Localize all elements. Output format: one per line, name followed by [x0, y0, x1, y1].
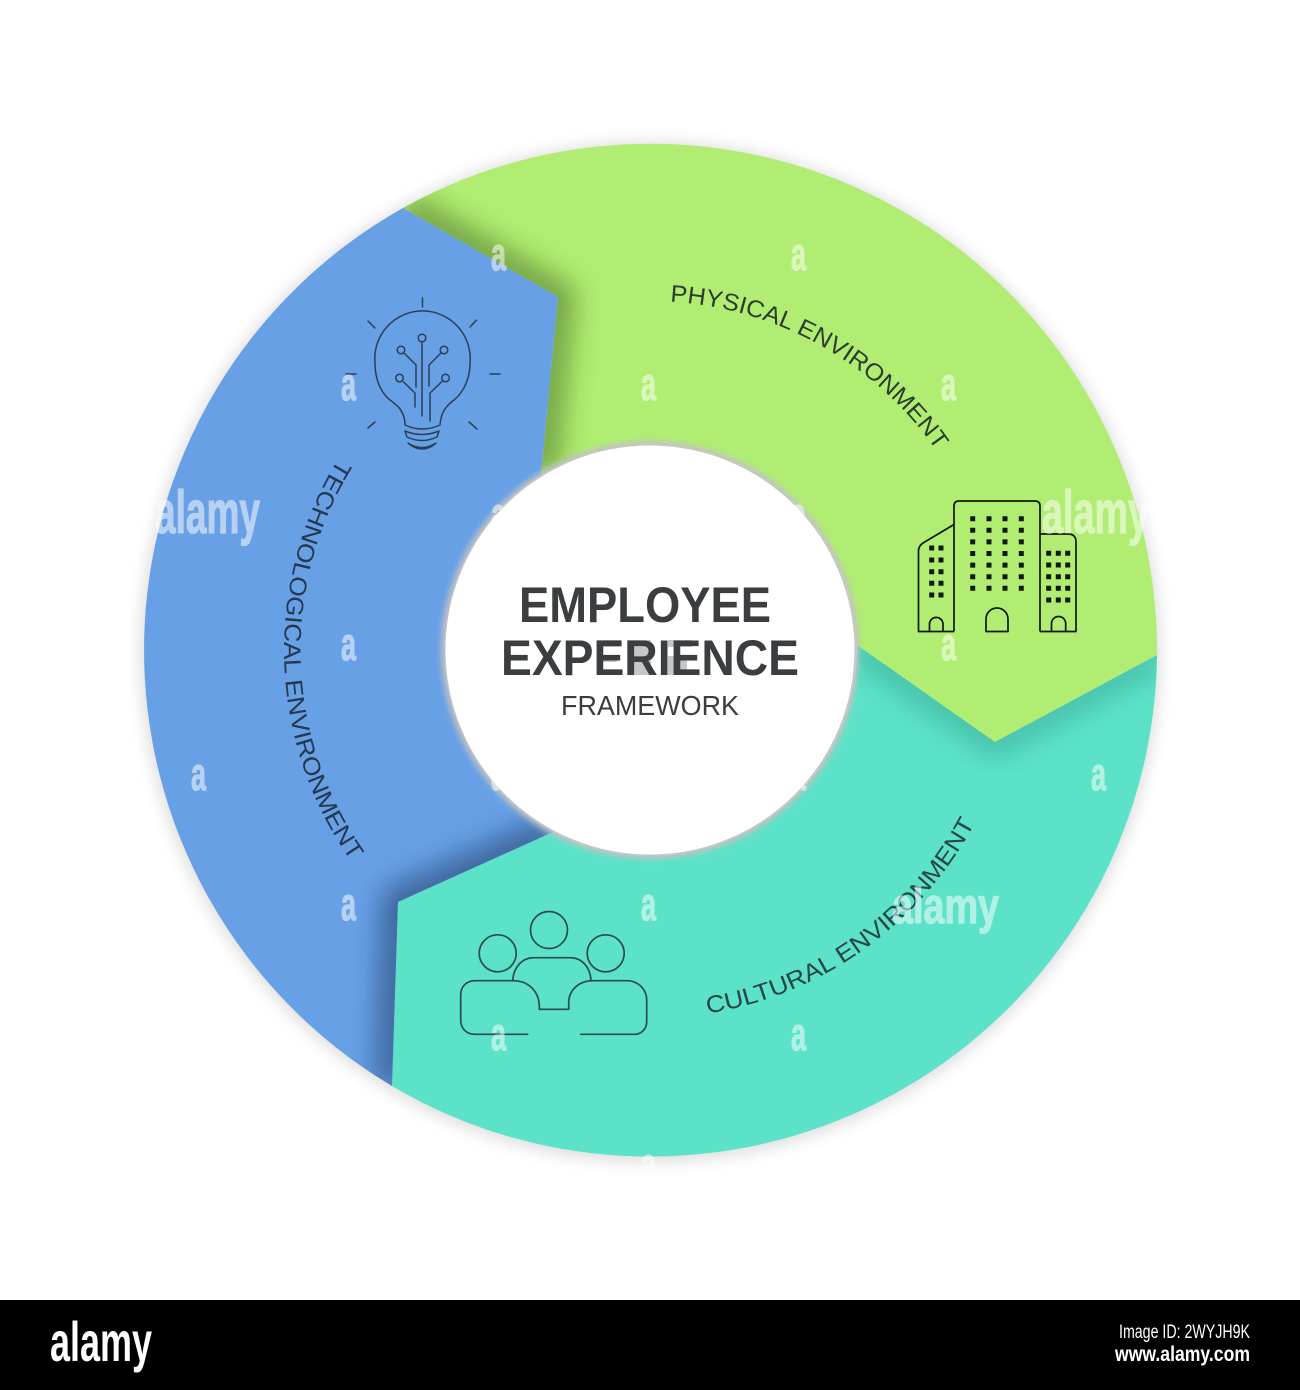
footer text: website: www.alamy.com [1114, 1343, 1250, 1366]
watermark: repeating letters: a [791, 1008, 806, 1060]
icon: light bulb [346, 298, 500, 449]
title line: employee: EMPLOYEE [519, 577, 771, 633]
footer logo: alamy: alamy [50, 1310, 152, 1373]
icon: office buildings [918, 501, 1076, 632]
watermark: repeating letters: a [791, 748, 806, 800]
watermark: repeating letters: a [491, 488, 506, 540]
watermark: repeating letters: a [641, 1138, 656, 1190]
watermark: repeating letters: a [941, 358, 956, 410]
outer ring shadow [140, 142, 1160, 1162]
watermark: large alamy right: alamy [1042, 479, 1149, 546]
watermark: repeating letters: a [491, 748, 506, 800]
watermark: repeating letters: a [191, 748, 206, 800]
center circle shadow [441, 441, 859, 859]
label: physical environment: PHYSICAL ENVIRONMENT [672, 285, 950, 446]
watermarks [155, 228, 1149, 1190]
watermark: repeating letters: a [341, 878, 356, 930]
label: technological environment: TECHNOLOGICAL ENVIRONMENT [284, 464, 364, 856]
title [501, 577, 799, 721]
watermark: repeating letters: a [791, 488, 806, 540]
title line: experience: EXPERIENCE [501, 630, 799, 686]
watermark: repeating letters: a [491, 1008, 506, 1060]
footer text: image id: Image ID: 2WYJH9K [1119, 1322, 1250, 1343]
panel: physical environment segment [403, 144, 1157, 742]
watermark patches behind title [597, 640, 692, 675]
watermark: large alamy bottom: alamy [892, 878, 999, 934]
watermark: repeating letters [191, 228, 1106, 1190]
label: cultural environment: CULTURAL ENVIRONMENT [707, 816, 972, 1012]
panel: technological environment segment [144, 208, 558, 1086]
watermark: repeating letters: a [341, 618, 356, 670]
subtitle: framework: FRAMEWORK [561, 690, 740, 721]
center circle [446, 446, 854, 854]
watermark: repeating letters: a [491, 228, 506, 280]
watermark: repeating letters: a [791, 228, 806, 280]
watermark: large alamy left: alamy [155, 479, 260, 546]
watermark: repeating letters: a [1091, 748, 1106, 800]
watermark: repeating letters: a [641, 358, 656, 410]
watermark: repeating letters: a [341, 358, 356, 410]
panel: cultural environment segment [392, 645, 1157, 1157]
watermark: repeating letters: a [641, 878, 656, 930]
watermark: repeating letters: a [941, 618, 956, 670]
footer bar [0, 1300, 1300, 1390]
icon: group of people [461, 912, 647, 1034]
